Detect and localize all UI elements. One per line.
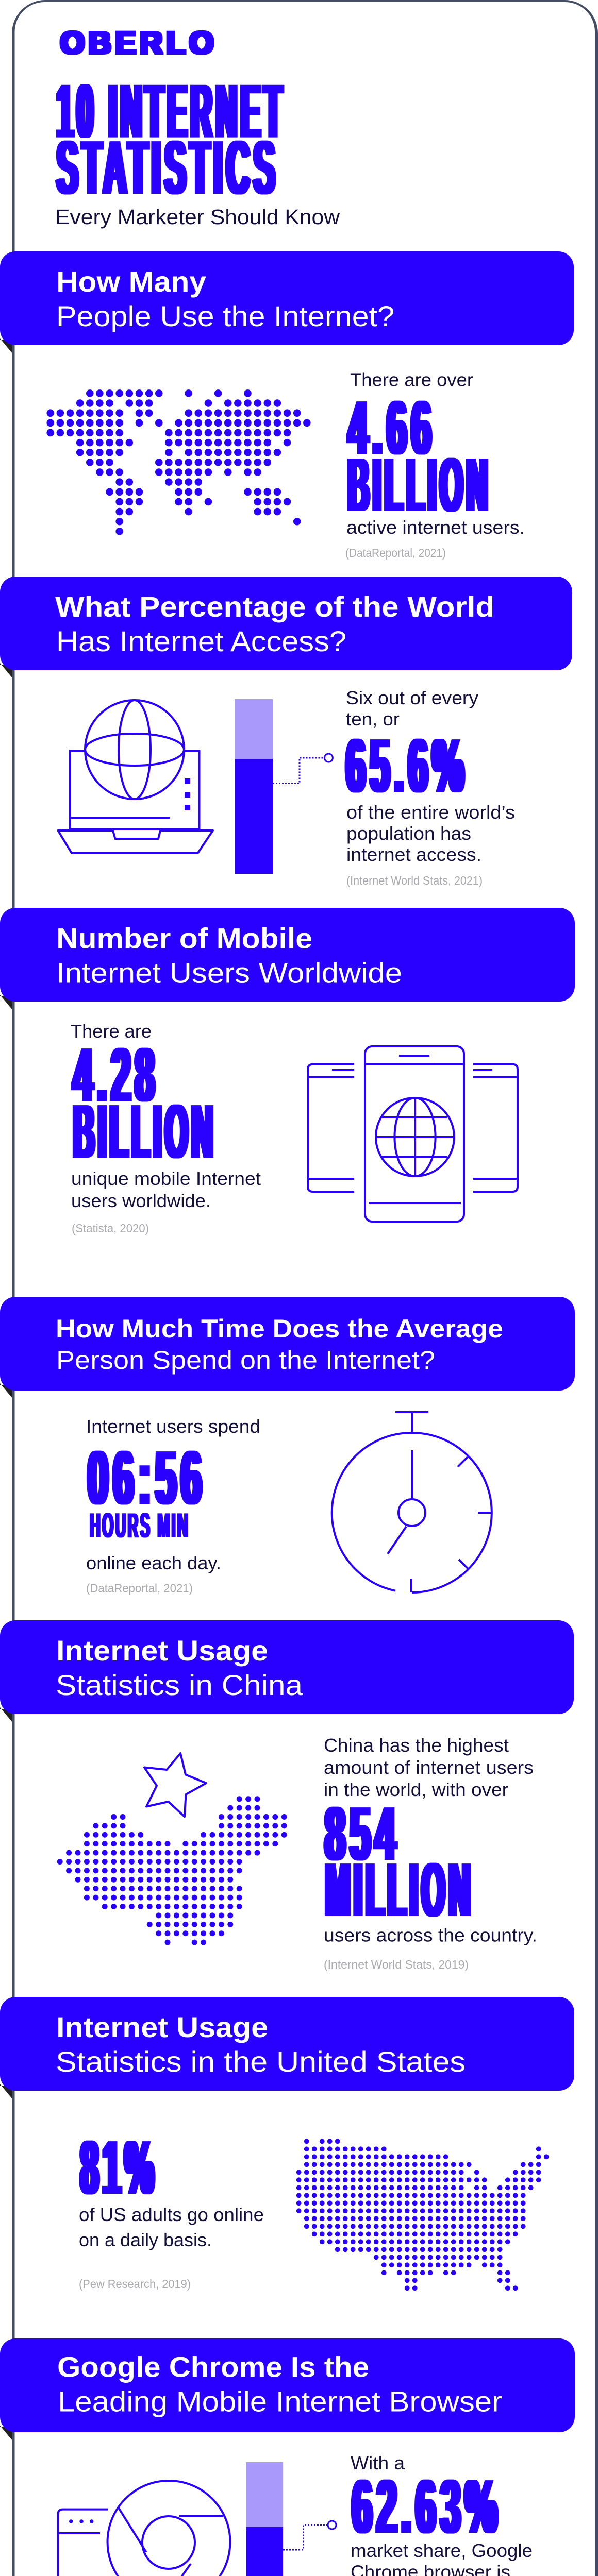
text: STATISTICS <box>57 125 279 210</box>
stat text: active internet users. <box>346 517 525 538</box>
banner 3: Number of Mobile <box>56 922 312 955</box>
dotted map of China <box>60 1799 284 1942</box>
bar: 62.63 percent <box>246 2462 283 2576</box>
stat text: in the world, with over <box>324 1779 508 1800</box>
icon: chrome in browser window <box>58 2481 230 2576</box>
stat text: BILLION <box>73 1089 217 1174</box>
stat text: ten, or <box>346 708 400 730</box>
banner 5 <box>0 1620 574 1722</box>
banner 1: People Use the Internet? <box>56 300 394 332</box>
stat text: 06:56 <box>88 1435 206 1520</box>
icon: stopwatch <box>332 1412 492 1592</box>
stat text: (DataReportal, 2021) <box>86 1582 193 1595</box>
section 1: how many people use the internet <box>0 251 574 560</box>
stat text: HOURS MIN <box>90 1506 190 1545</box>
icon: star <box>144 1753 206 1817</box>
banner 3 <box>0 908 575 1010</box>
stat text: There are over <box>350 369 473 390</box>
stat text <box>345 369 525 560</box>
stat text: users worldwide. <box>71 1190 211 1211</box>
section 4: time spent on internet <box>0 1297 575 1595</box>
stat text <box>346 687 515 887</box>
stat text: (Pew Research, 2019) <box>79 2277 191 2291</box>
stat text: There are <box>71 1021 152 1042</box>
dotted world map <box>51 393 307 531</box>
connector <box>283 2521 336 2550</box>
icon: globe on laptop <box>58 700 213 853</box>
stat text: of the entire world’s <box>346 802 515 823</box>
stat text: Internet users spend <box>86 1416 260 1437</box>
banner 6: Statistics in the United States <box>56 2045 466 2078</box>
banner 7 <box>0 2338 575 2441</box>
stat text <box>86 1416 260 1595</box>
stat text: China has the highest <box>324 1735 509 1756</box>
stat text: internet access. <box>346 844 481 865</box>
banner 4 <box>0 1297 575 1398</box>
banner 5: Internet Usage <box>56 1634 268 1667</box>
title <box>57 69 286 210</box>
banner 7: Leading Mobile Internet Browser <box>58 2385 502 2417</box>
connector <box>273 754 333 783</box>
stat text: With a <box>351 2452 405 2473</box>
stat text <box>79 2125 264 2291</box>
stat text: population has <box>346 823 471 844</box>
dotted map of United States <box>299 2141 546 2288</box>
stat text: (Internet World Stats, 2019) <box>324 1958 469 1971</box>
banner 6 <box>0 1997 574 2099</box>
stat text: online each day. <box>86 1552 221 1573</box>
banner 6: Internet Usage <box>56 2011 268 2043</box>
stat text: 4.66 <box>348 385 436 470</box>
stat text <box>351 2452 533 2576</box>
banner 7: Google Chrome Is the <box>57 2350 369 2383</box>
stat text: on a daily basis. <box>79 2229 212 2250</box>
banner 2: Has Internet Access? <box>56 625 346 657</box>
stat text <box>71 1021 261 1235</box>
section 3: mobile internet users <box>0 908 575 1235</box>
banner 3: Internet Users Worldwide <box>56 957 402 989</box>
stat text: amount of internet users <box>324 1757 534 1778</box>
stat text: 81% <box>80 2125 158 2210</box>
section 5: china <box>0 1620 574 1971</box>
banner 2 <box>0 577 572 678</box>
section 6: united states <box>0 1997 574 2291</box>
stat text: Six out of every <box>346 687 478 708</box>
icon: three phones with globe <box>308 1046 518 1222</box>
stat text: users across the country. <box>324 1925 537 1945</box>
stat text: (Internet World Stats, 2021) <box>346 874 483 887</box>
stat text: market share, Google <box>351 2540 533 2561</box>
stat text <box>324 1735 537 1971</box>
section 7: google chrome <box>0 2338 575 2576</box>
banner 5: Statistics in China <box>56 1669 303 1701</box>
stat text: of US adults go online <box>79 2204 264 2225</box>
subtitle: Every Marketer Should Know <box>55 205 340 229</box>
banner 2: What Percentage of the World <box>55 590 494 623</box>
stat text: 4.28 <box>73 1032 159 1117</box>
logo: Oberlo: OBERLO <box>60 25 218 60</box>
section 2: percentage of world with access <box>0 577 572 887</box>
banner 1 <box>0 251 574 353</box>
stat text: 854 <box>325 1791 400 1876</box>
banner 4: How Much Time Does the Average <box>56 1314 503 1343</box>
stat text: (Statista, 2020) <box>72 1222 149 1235</box>
banner 4: Person Spend on the Internet? <box>56 1346 435 1375</box>
bar: 65.6 percent <box>235 699 273 874</box>
banner 1: How Many <box>56 265 206 298</box>
stat text: unique mobile Internet <box>71 1168 261 1189</box>
stat text: (DataReportal, 2021) <box>345 546 446 560</box>
